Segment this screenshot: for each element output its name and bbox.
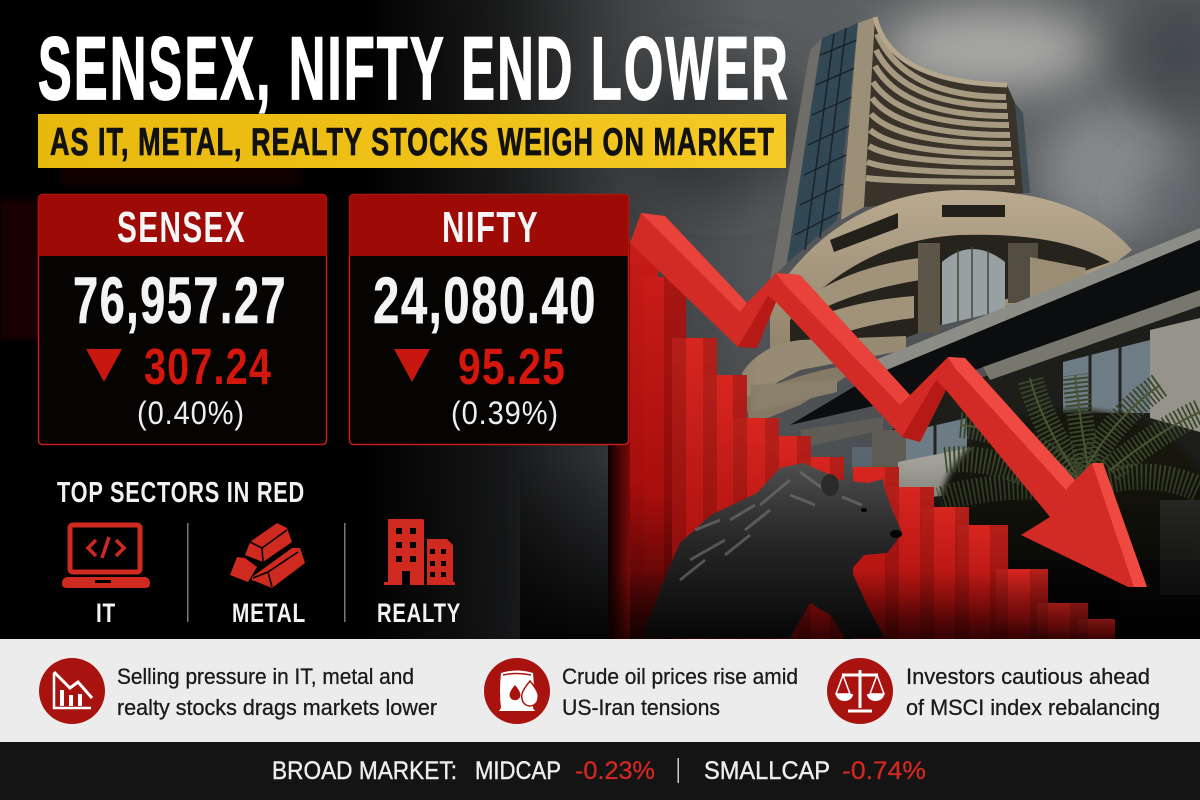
reason text 2: US-Iran tensions: [562, 695, 720, 720]
Sensex change: 307.24: [144, 338, 272, 395]
panel: Nifty: [350, 194, 628, 444]
Nifty percent: (0.39%): [451, 395, 559, 431]
reason text 1: Selling pressure in IT, metal and: [117, 664, 414, 689]
midcap value: -0.23%: [575, 757, 655, 785]
palm trees: [940, 375, 1200, 640]
icon: balance scale: [827, 658, 893, 724]
exchange tower: [770, 17, 1030, 280]
panel: top sectors: [57, 477, 461, 628]
Nifty value: 24,080.40: [373, 263, 597, 337]
reason text 2: Crude oil prices rise amid: [562, 664, 798, 689]
Sensex down triangle: [86, 349, 122, 382]
reason text 1: realty stocks drags markets lower: [117, 695, 437, 720]
podium: [742, 190, 1132, 425]
icon: metal bars: [230, 523, 305, 588]
REALTY label: REALTY: [377, 598, 461, 628]
panel: reasons strip: [0, 639, 1200, 742]
background photo scene: [0, 0, 1200, 640]
icon: buildings: [384, 519, 455, 585]
subtitle banner: AS IT, METAL, REALTY STOCKS WEIGH ON MARKET: [50, 121, 775, 164]
Nifty change: 95.25: [458, 338, 566, 395]
Sensex value: 76,957.27: [73, 263, 287, 337]
IT label: IT: [96, 598, 116, 628]
icon: laptop: [62, 525, 150, 588]
Nifty label: NIFTY: [442, 203, 539, 252]
red falling arrow: [630, 213, 1147, 587]
broad market label: BROAD MARKET:: [272, 757, 457, 785]
panel: Sensex: [38, 194, 326, 444]
smallcap label: SMALLCAP: [704, 757, 830, 785]
subtitle banner: [38, 114, 786, 168]
icon: oil barrel: [484, 658, 550, 724]
reason text 3: Investors cautious ahead: [906, 664, 1150, 689]
Sensex label: SENSEX: [117, 203, 246, 252]
Nifty down triangle: [394, 349, 430, 382]
red bar chart: [608, 240, 1120, 640]
smallcap value: -0.74%: [842, 757, 926, 785]
midcap label: MIDCAP: [475, 757, 561, 785]
icon: falling chart: [39, 658, 105, 724]
reason text 3: of MSCI index rebalancing: [906, 695, 1160, 720]
bear: [642, 463, 902, 638]
METAL label: METAL: [232, 598, 306, 628]
sectors heading: TOP SECTORS IN RED: [57, 477, 305, 509]
footer: broad market: [0, 742, 1200, 800]
lower roof slab and side building: [750, 228, 1200, 640]
Sensex percent: (0.40%): [137, 395, 245, 431]
